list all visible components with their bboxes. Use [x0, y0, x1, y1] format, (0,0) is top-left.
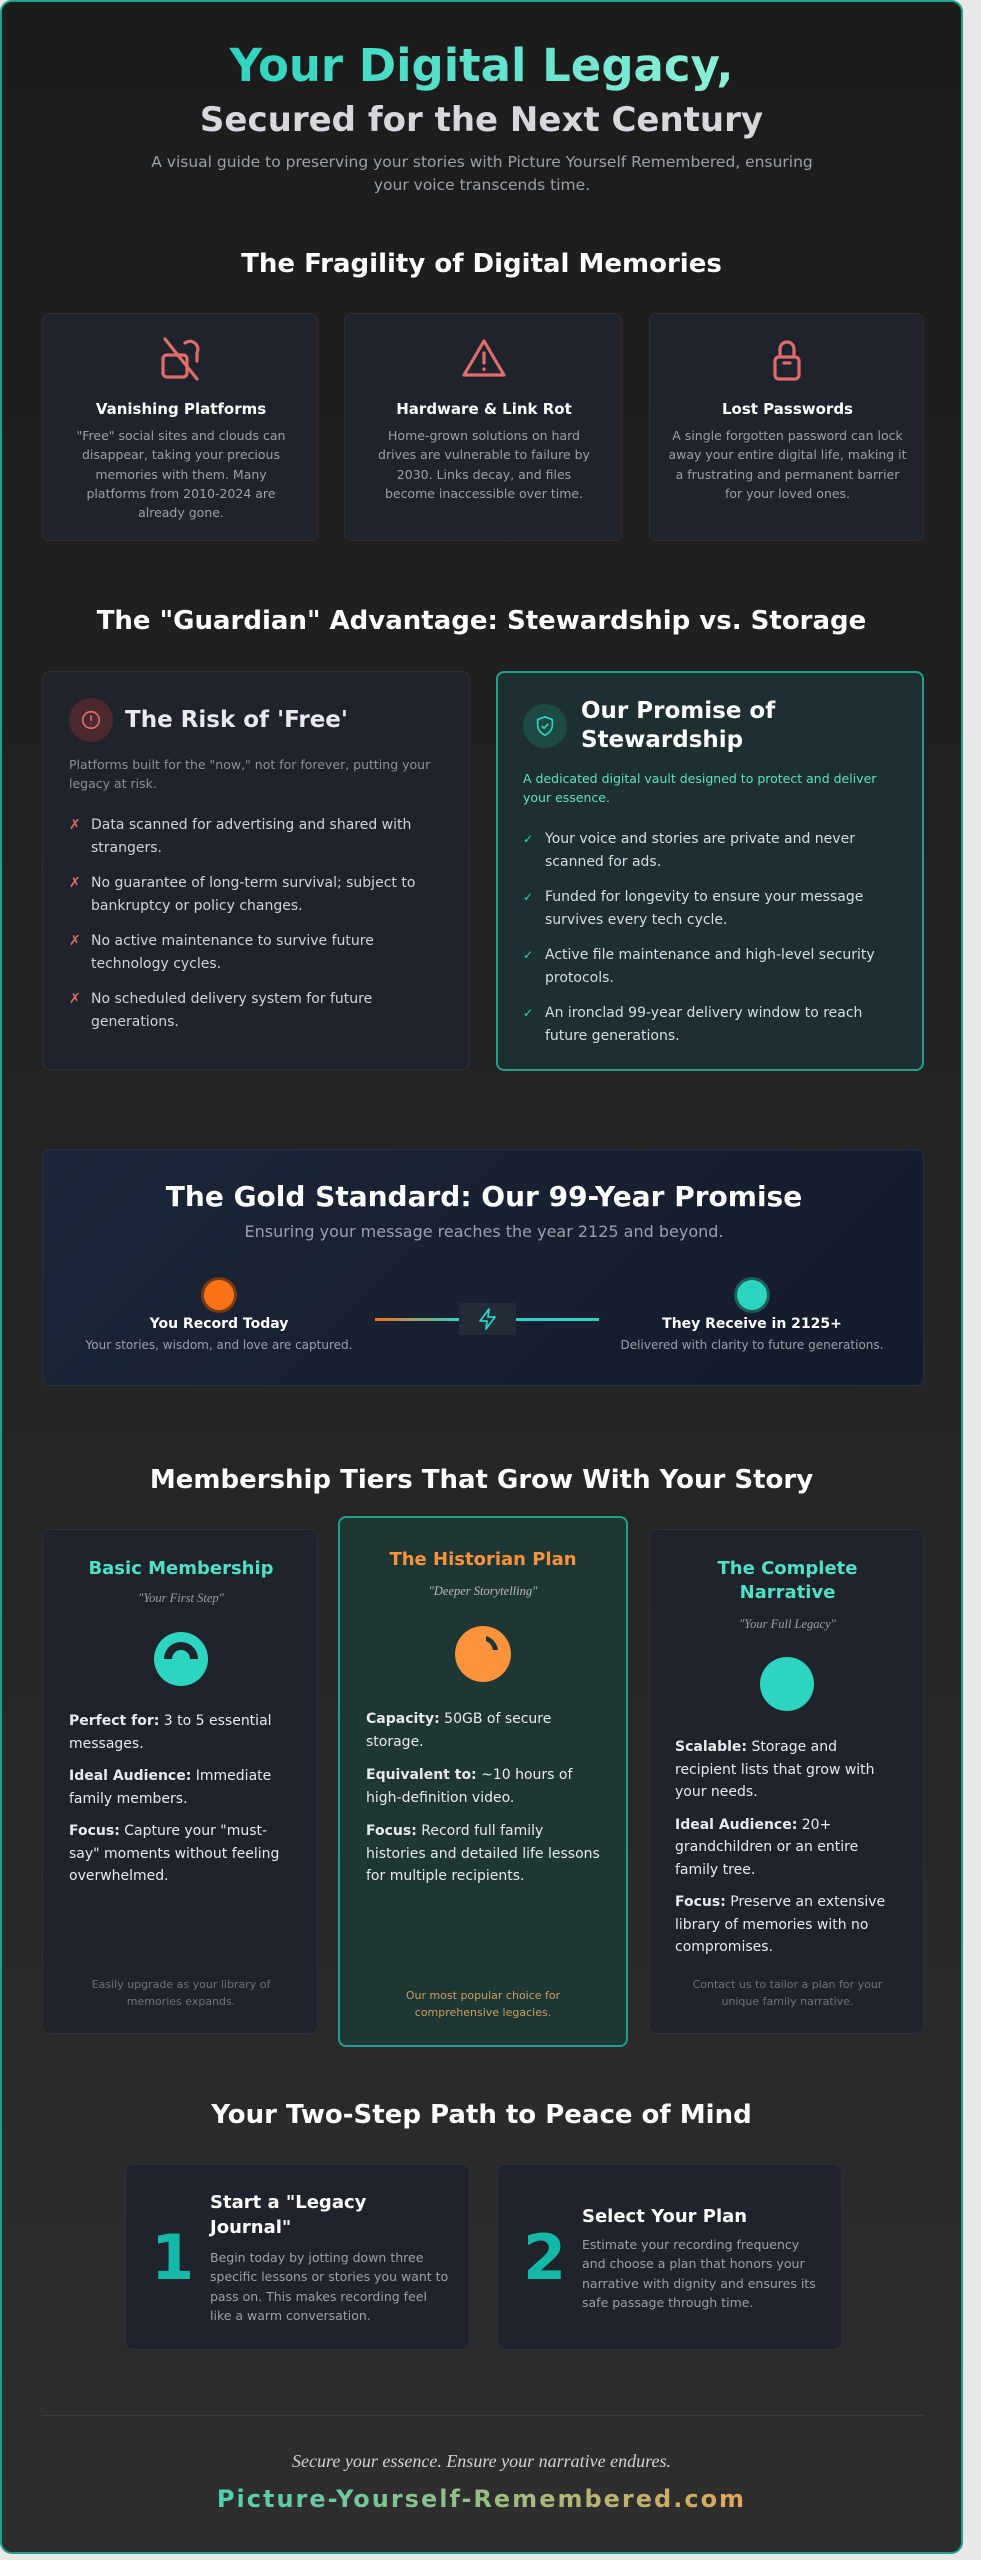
- panel intro: Platforms built for the "now," not for forever, putting your legacy at risk.: [69, 757, 430, 791]
- heading: membership: Membership Tiers That Grow With Your Story: [150, 1465, 813, 1495]
- tier footnote: Our most popular choice for comprehensive legacies.: [406, 1989, 560, 2019]
- icon: tier complete: [760, 1657, 814, 1711]
- step text: Estimate your recording frequency and choose a plan that honors your narrative with dignity and ensures its safe passage through time.: [582, 2237, 816, 2310]
- timeline end: [621, 1277, 883, 1352]
- list: risks: Data scanned for advertising and shared with strangers.: [91, 817, 411, 856]
- timeline end: They Receive in 2125+: [662, 1316, 842, 1332]
- list: promises: An ironclad 99-year delivery window to reach future generations.: [545, 1005, 862, 1044]
- tier tagline: "Deeper Storytelling": [429, 1584, 537, 1598]
- card text: Home-grown solutions on hard drives are vulnerable to failure by 2030. Links decay, and files become inaccessible over time.: [378, 428, 590, 501]
- panel: risk of free: [42, 671, 470, 1070]
- tier title: The Complete: [718, 1558, 857, 1579]
- list: promises: ✓: [523, 832, 533, 846]
- list: risks: [69, 817, 415, 1030]
- icon: tier basic: [154, 1632, 208, 1686]
- list: risks: No active maintenance to survive future technology cycles.: [91, 933, 374, 972]
- list: risks: ✗: [69, 991, 81, 1007]
- icon: orange dot: [204, 1280, 234, 1310]
- panel: basic tier: [42, 1529, 318, 2034]
- panel: step 1: [125, 2164, 470, 2350]
- list: promises: Your voice and stories are private and never scanned for ads.: [545, 831, 855, 870]
- subtitle heading: Secured for the Next Century: [200, 100, 763, 140]
- list: risks: ✗: [69, 875, 81, 891]
- list: promises: Active file maintenance and high-level security protocols.: [545, 947, 875, 986]
- panel title: Our Promise of Stewardship: [581, 698, 775, 753]
- panel title: The Risk of 'Free': [125, 707, 348, 733]
- tier details: [675, 1739, 885, 1955]
- card title: Hardware & Link Rot: [396, 400, 572, 418]
- list: risks: ✗: [69, 933, 81, 949]
- list: promises: ✓: [523, 1006, 533, 1020]
- heading: gold standard: The Gold Standard: Our 99-Year Promise: [166, 1180, 802, 1213]
- footer url: Picture-Yourself-Remembered.com: [217, 2485, 746, 2513]
- title: Your Digital Legacy,: [229, 39, 734, 92]
- icon: lock: [773, 340, 801, 381]
- card title: Lost Passwords: [722, 400, 853, 418]
- list: promises: [523, 831, 875, 1044]
- tier tagline: "Your Full Legacy": [739, 1617, 836, 1631]
- tier footnote: Easily upgrade as your library of memories expands.: [92, 1978, 270, 2008]
- tier details: Ideal Audience: Immediate family members.: [69, 1768, 271, 1806]
- intro text: A visual guide to preserving your stories with Picture Yourself Remembered, ensuring your voice transcends time.: [151, 153, 813, 194]
- subtitle: Ensuring your message reaches the year 2125 and beyond.: [244, 1222, 724, 1241]
- list: promises: ✓: [523, 890, 533, 904]
- tier title: Narrative: [740, 1582, 835, 1603]
- tier details: Capacity: 50GB of secure storage.: [366, 1711, 551, 1750]
- icon: warning: [462, 339, 506, 377]
- heading: fragility: The Fragility of Digital Memories: [241, 249, 722, 279]
- tier title: The Historian Plan: [389, 1549, 577, 1570]
- tier details: Focus: Capture your "must-say" moments without feeling overwhelmed.: [69, 1823, 279, 1884]
- panel: complete tier: [649, 1529, 924, 2034]
- list: risks: ✗: [69, 817, 81, 833]
- step number: 2: [523, 2221, 566, 2294]
- card text: A single forgotten password can lock away your entire digital life, making it a frustrating and permanent barrier for your loved ones.: [668, 428, 907, 501]
- step title: Select Your Plan: [582, 2206, 747, 2227]
- panel: historian tier: [338, 1516, 628, 2047]
- timeline start: Your stories, wisdom, and love are captured.: [86, 1338, 352, 1352]
- tier details: Perfect for: 3 to 5 essential messages.: [69, 1713, 272, 1752]
- panel: gold standard: [42, 1149, 924, 1386]
- tier details: Scalable: Storage and recipient lists that grow with your needs.: [675, 1739, 875, 1800]
- icon: tier historian: [455, 1626, 511, 1682]
- tier details: Focus: Record full family histories and detailed life lessons for multiple recipients.: [366, 1823, 600, 1884]
- tier title: Basic Membership: [88, 1558, 274, 1579]
- timeline start: You Record Today: [150, 1316, 288, 1332]
- icon: cloud off: [161, 337, 200, 381]
- tier details: Ideal Audience: 20+ grandchildren or an entire family tree.: [675, 1816, 858, 1878]
- icon: teal dot: [737, 1280, 767, 1310]
- tier details: Focus: Preserve an extensive library of memories with no compromises.: [675, 1894, 885, 1955]
- list: promises: ✓: [523, 948, 533, 962]
- timeline end: Delivered with clarity to future generations.: [621, 1338, 883, 1352]
- list: risks: No guarantee of long-term survival; subject to bankruptcy or policy changes.: [91, 875, 415, 914]
- panel intro: A dedicated digital vault designed to protect and deliver your essence.: [523, 771, 876, 805]
- tier title: [718, 1558, 857, 1603]
- icon: alert circle: [69, 698, 113, 742]
- list: promises: Funded for longevity to ensure your message survives every tech cycle.: [545, 889, 863, 928]
- tier tagline: "Your First Step": [138, 1591, 224, 1605]
- panel: lost passwords: [649, 313, 924, 541]
- tier details: [69, 1713, 279, 1884]
- panel: vanishing platforms: [42, 313, 318, 541]
- step number: 1: [151, 2221, 194, 2294]
- timeline start: [86, 1277, 352, 1352]
- arrow: timeline connector: [375, 1303, 599, 1335]
- card text: "Free" social sites and clouds can disappear, taking your precious memories with them. Many platforms from 2010-2024 are already gone.: [77, 428, 285, 520]
- heading: two-step: Your Two-Step Path to Peace of Mind: [211, 2100, 752, 2130]
- list: risks: No scheduled delivery system for future generations.: [91, 991, 372, 1030]
- icon: shield: [523, 704, 567, 748]
- footer tagline: Secure your essence. Ensure your narrative endures.: [292, 2451, 671, 2471]
- panel: hardware rot: [344, 313, 622, 541]
- tier details: [366, 1711, 600, 1884]
- heading: guardian: The "Guardian" Advantage: Stewardship vs. Storage: [97, 606, 866, 636]
- step title: Start a "Legacy Journal": [210, 2192, 366, 2238]
- panel: step 2: [497, 2164, 842, 2350]
- tier footnote: Contact us to tailor a plan for your unique family narrative.: [693, 1978, 882, 2008]
- step text: Begin today by jotting down three specific lessons or stories you want to pass on. This makes recording feel like a warm conversation.: [210, 2250, 448, 2323]
- tier details: Equivalent to: ~10 hours of high-definition video.: [366, 1767, 572, 1806]
- card title: Vanishing Platforms: [96, 400, 266, 418]
- panel: stewardship: [496, 671, 924, 1071]
